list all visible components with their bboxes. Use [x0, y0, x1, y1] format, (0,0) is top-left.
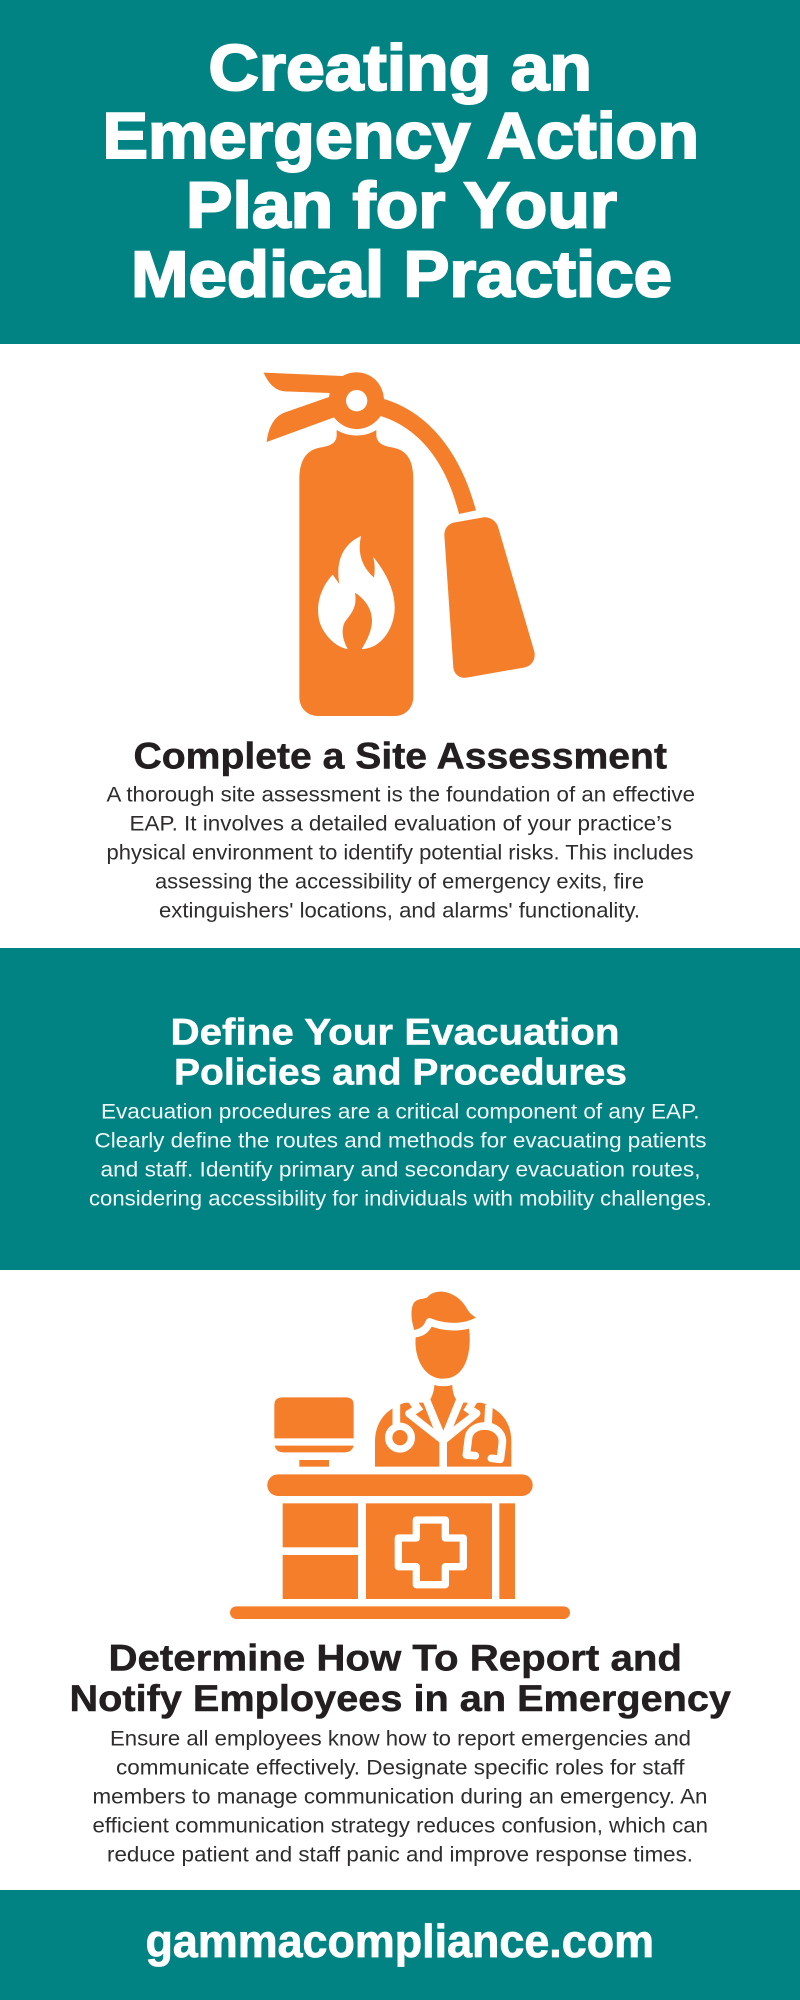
text block: reporting description	[92, 1728, 708, 1866]
icon: doctor at reception desk	[230, 1292, 570, 1619]
text block: site assessment description: extinguishers' locations, and alarms' functionality.	[159, 900, 640, 922]
heading: determine how to report and notify employees	[70, 1638, 731, 1719]
text block: evacuation description: considering accessibility for individuals with mobility challenges.	[89, 1188, 712, 1210]
icon: fire extinguisher	[264, 372, 535, 716]
text block: site assessment description: A thorough site assessment is the foundation of an effective	[106, 784, 695, 806]
text block: reporting description: Ensure all employees know how to report emergencies and	[110, 1728, 691, 1750]
title	[102, 31, 699, 310]
panel: define your evacuation policies	[0, 948, 800, 1270]
footer website url: gammacompliance.com	[146, 1915, 654, 1967]
title: Emergency Action	[102, 99, 699, 172]
heading: determine how to report and notify employees: Determine How To Report and	[108, 1638, 682, 1678]
panel: title header	[0, 0, 800, 344]
text block: site assessment description: physical environment to identify potential risks. This includes	[106, 842, 694, 864]
text block: reporting description: communicate effectively. Designate specific roles for staff	[116, 1756, 685, 1780]
text block: site assessment description: assessing the accessibility of emergency exits, fire	[155, 870, 644, 894]
text block: evacuation description: Evacuation procedures are a critical component of any EAP.	[101, 1100, 700, 1124]
text block: evacuation description: Clearly define the routes and methods for evacuating patients	[94, 1130, 706, 1152]
text block: evacuation description	[89, 1100, 712, 1210]
title: Creating an	[208, 31, 592, 104]
title: Medical Practice	[131, 238, 672, 310]
panel: footer	[0, 1890, 800, 2000]
text block: site assessment description	[106, 784, 695, 922]
text block: site assessment description: EAP. It involves a detailed evaluation of your practice’s	[130, 812, 672, 836]
heading: determine how to report and notify employees: Notify Employees in an Emergency	[70, 1678, 731, 1719]
title: Plan for Your	[186, 168, 617, 242]
heading: define your evacuation policies and procedures	[170, 1012, 627, 1092]
text block: evacuation description: and staff. Identify primary and secondary evacuation routes,	[100, 1158, 700, 1182]
heading: complete a site assessment: Complete a Site Assessment	[134, 736, 667, 776]
text block: reporting description: reduce patient and staff panic and improve response times.	[107, 1844, 693, 1866]
text block: reporting description: members to manage communication during an emergency. An	[92, 1786, 707, 1808]
panel: complete a site assessment	[106, 372, 695, 922]
text block: reporting description: efficient communication strategy reduces confusion, which can	[92, 1814, 708, 1838]
panel: report and notify employees	[70, 1292, 731, 1866]
heading: define your evacuation policies and procedures: Policies and Procedures	[174, 1052, 627, 1092]
heading: define your evacuation policies and procedures: Define Your Evacuation	[170, 1012, 620, 1052]
